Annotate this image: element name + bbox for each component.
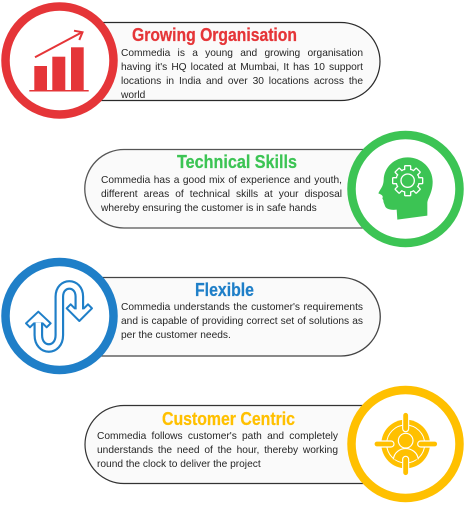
text block: customer centric: understands the need of the hour, thereby working bbox=[97, 444, 338, 456]
text block: technical skills: whereby ensuring the customer is in safe hands bbox=[101, 202, 317, 214]
panel: growing organisation bbox=[90, 22, 380, 102]
text block: flexible: Commedia understands the customer's requirements bbox=[121, 302, 363, 312]
icon: blue ring with s-shaped arrows bbox=[6, 262, 114, 370]
text block: technical skills: different areas of technical skills at your disposal bbox=[101, 188, 342, 200]
text block: customer centric: Commedia follows customer's path and completely bbox=[97, 430, 338, 442]
panel: customer centric bbox=[85, 406, 375, 484]
panel: flexible bbox=[90, 278, 380, 356]
text block: technical skills: Commedia has a good mix of experience and youth, bbox=[101, 174, 342, 186]
text block: flexible: per the customer needs. bbox=[121, 330, 231, 340]
heading: customer centric: Customer Centric bbox=[162, 408, 295, 429]
text block: growing organisation: world bbox=[121, 90, 145, 100]
icon: yellow ring with customer target bbox=[352, 390, 460, 498]
text block: growing organisation: having it's HQ located at Mumbai, It has 10 support bbox=[121, 62, 363, 72]
text block: customer centric bbox=[97, 430, 338, 472]
heading: technical skills: Technical Skills bbox=[177, 151, 297, 172]
text block: growing organisation: locations in India and over 30 locations across the bbox=[121, 76, 363, 86]
text block: flexible: and is capable of providing correct set of solutions as bbox=[121, 316, 363, 326]
text block: technical skills bbox=[101, 174, 342, 216]
icon: green ring with head and gear bbox=[352, 135, 460, 243]
icon: red ring with growth chart bbox=[6, 6, 114, 114]
text block: flexible bbox=[121, 300, 363, 342]
heading: flexible: Flexible bbox=[195, 279, 254, 300]
text block: growing organisation: Commedia is a young and growing organisation bbox=[121, 48, 363, 58]
heading: growing organisation: Growing Organisation bbox=[132, 24, 297, 45]
panel: technical skills bbox=[85, 150, 375, 228]
text block: customer centric: round the clock to deliver the project bbox=[97, 458, 261, 470]
text block: growing organisation bbox=[121, 46, 363, 102]
